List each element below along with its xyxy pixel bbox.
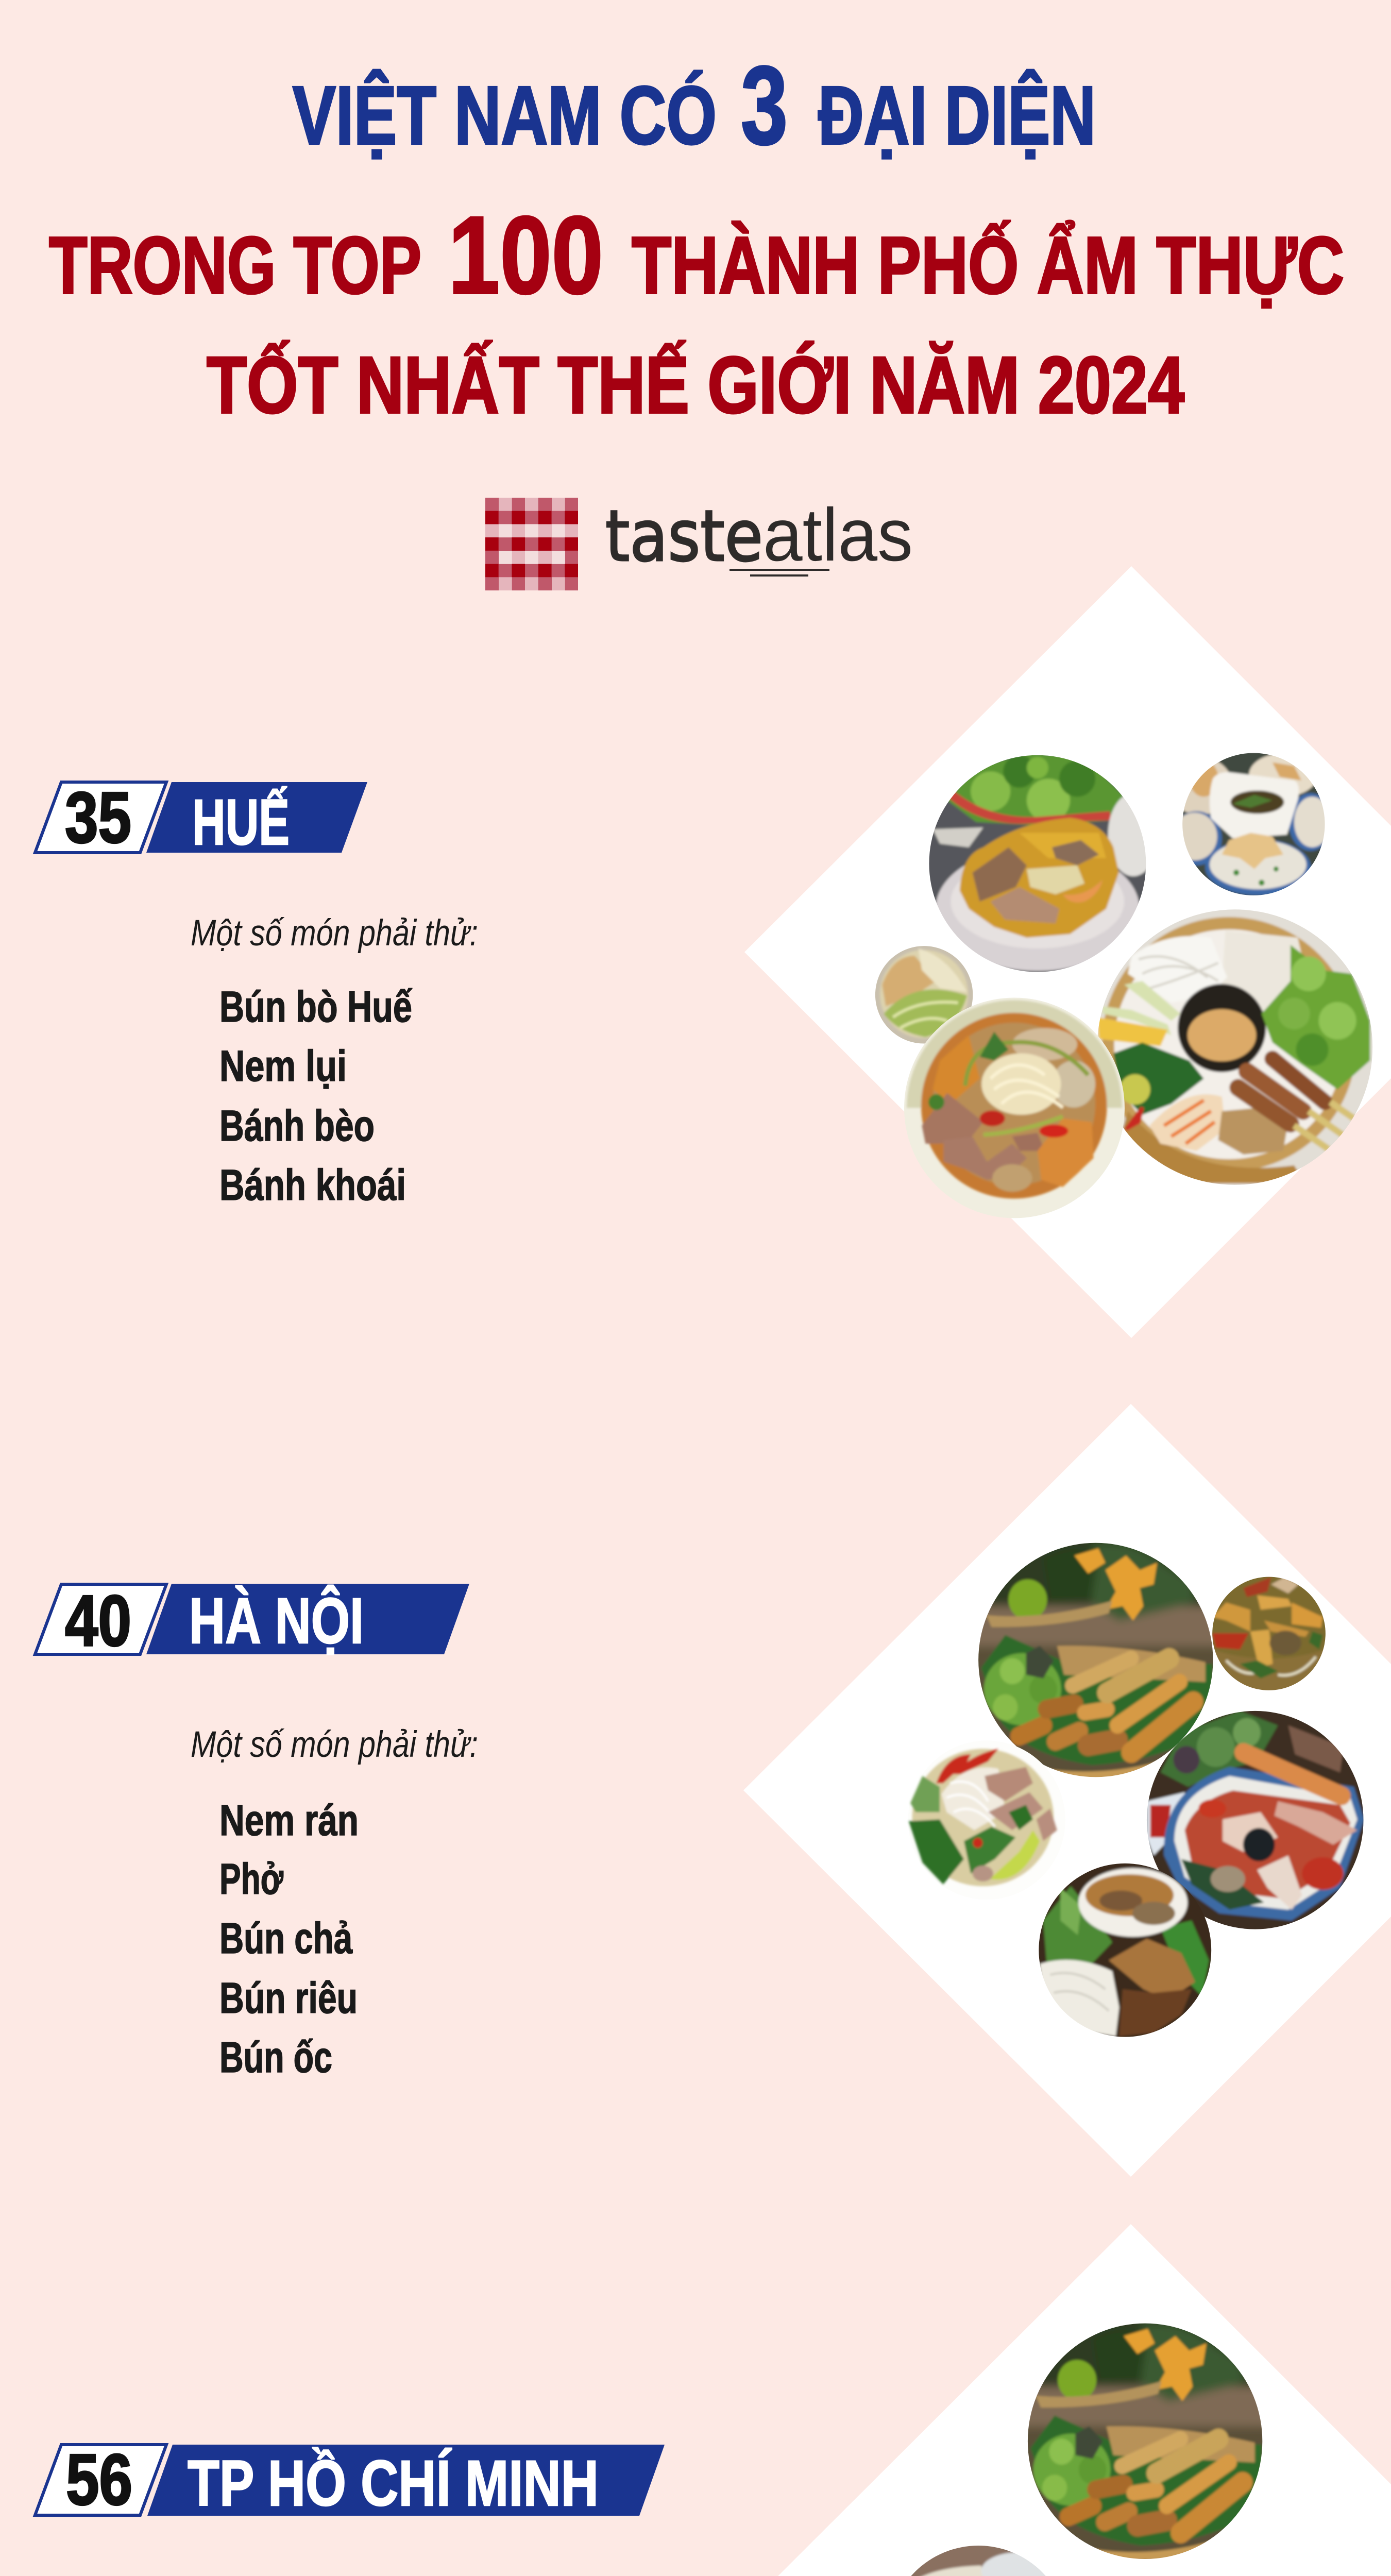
rank badge 35: 35 [65, 777, 131, 858]
dish list [219, 1796, 359, 2081]
title line 3: TỐT NHẤT THẾ GIỚI NĂM 2024 [207, 341, 1184, 430]
logo: TasteAtlas [485, 493, 913, 590]
city banner TP Hồ Chí Minh: TP HỒ CHÍ MINH [188, 2448, 599, 2519]
city banner Huế: HUẾ [192, 787, 290, 858]
dish list [219, 982, 412, 1209]
dish list: Bún bò Huế [219, 982, 412, 1031]
photo: cơm tấm [1081, 2573, 1347, 2576]
city banner Hà Nội [146, 1584, 469, 1657]
title line 2 [49, 194, 1344, 317]
title line 1: 3 [741, 43, 788, 167]
title line 2: 100 [448, 194, 603, 317]
logo wordmark: taste [605, 496, 763, 578]
logo wordmark: atlas [763, 493, 913, 577]
logo wordmark [605, 493, 913, 578]
rank badge 56: 56 [66, 2439, 132, 2520]
rank badge 35 [35, 777, 166, 858]
title line 1: ĐẠI DIỆN [818, 69, 1096, 161]
section: TP Hồ Chí Minh [35, 2439, 665, 2576]
dish list: Nem lụi [219, 1042, 347, 1090]
dish list: Bánh bèo [219, 1101, 375, 1150]
dish list: Bún chả [219, 1914, 353, 1962]
dish list: Phở [219, 1855, 283, 1903]
icon: checkered cloth [485, 498, 578, 590]
dish list: Bánh khoái [219, 1161, 406, 1209]
title line 1: VIỆT NAM CÓ [293, 69, 717, 161]
section: Huế [35, 777, 478, 1209]
diamond: Huế panel [744, 566, 1391, 1338]
title line 2: TRONG TOP [49, 221, 421, 311]
city banner Hà Nội: HÀ NỘI [189, 1585, 364, 1657]
rank badge 40: 40 [65, 1580, 131, 1661]
food photos: TP Hồ Chí Minh [911, 2324, 1262, 2576]
dish list: Bún ốc [219, 2033, 332, 2081]
photo: bún chả [1037, 1861, 1214, 2040]
section: Hà Nội [35, 1580, 478, 2081]
rank badge 56 [35, 2439, 166, 2520]
photo: nem rán [978, 1543, 1213, 1777]
photo: bún riêu bowl [1143, 1707, 1368, 1935]
photo: bánh khoái [929, 755, 1146, 972]
title line 1 [293, 43, 1096, 167]
food photos: Hà Nội [908, 1530, 1368, 2040]
food photos: Huế [875, 750, 1376, 1218]
photo: bún bò Huế bowl [904, 997, 1125, 1218]
diamond: Hà Nội panel [743, 1404, 1391, 2177]
dish list: Bún riêu [219, 1974, 358, 2022]
photo: canh chua [885, 2542, 1073, 2576]
photo: bún riêu with tofu [1212, 1577, 1326, 1690]
city banner Huế [146, 782, 367, 858]
subheading: Một số món phải thử: [191, 1724, 478, 1765]
photo: nem lụi tray [1094, 906, 1376, 1189]
photo: bánh bèo [1182, 753, 1325, 895]
subheading: Một số món phải thử: [191, 913, 478, 954]
dish list: Nem rán [219, 1796, 359, 1844]
diamond: TP Hồ Chí Minh panel [743, 2224, 1391, 2576]
photo: phở bowl [908, 1740, 1065, 1900]
photo: shredded vegetables bowl [875, 946, 973, 1044]
rank badge 40 [35, 1580, 166, 1661]
photo: chả giò [1027, 2324, 1262, 2559]
title [49, 43, 1344, 430]
